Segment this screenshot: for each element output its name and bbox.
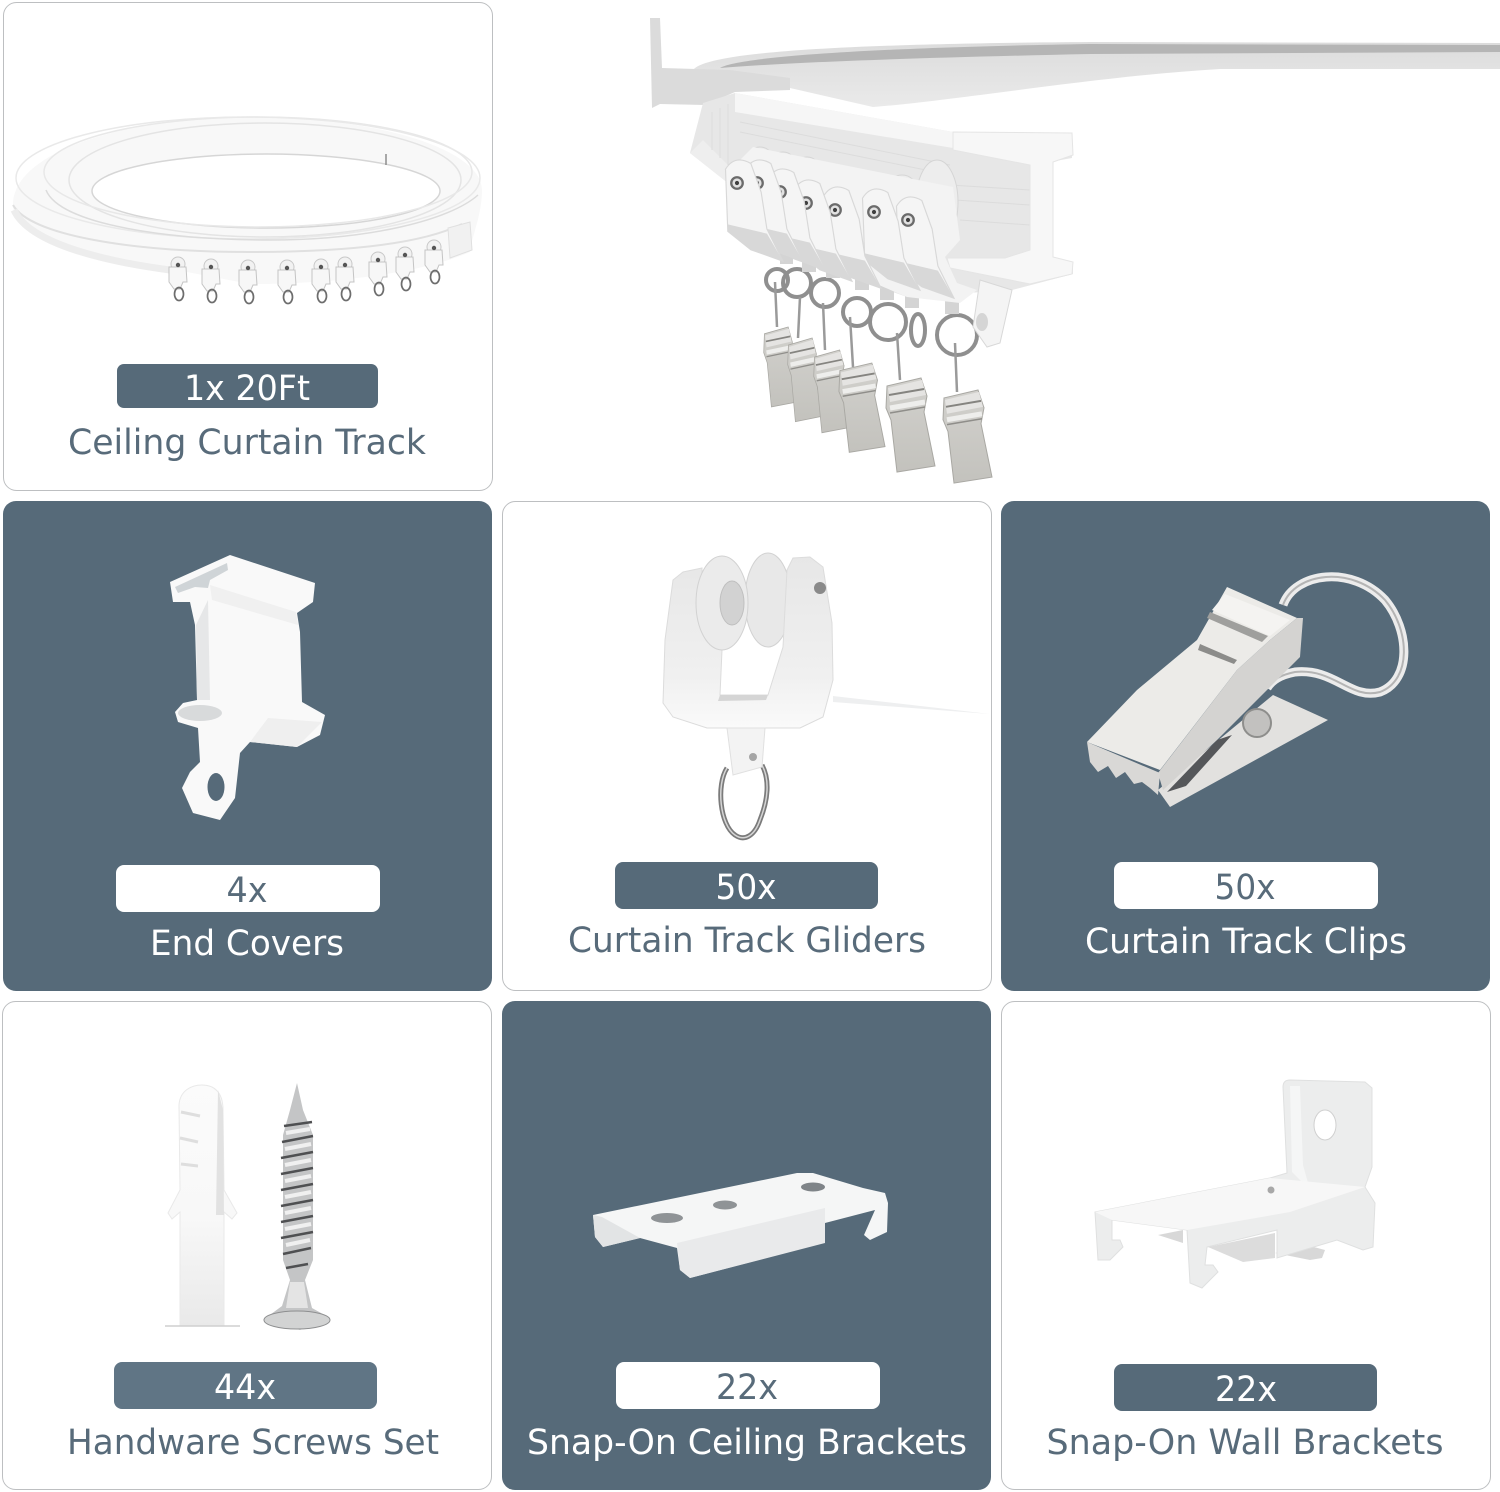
icon: glider xyxy=(663,553,990,838)
panel: ceiling curtain track xyxy=(4,2,492,490)
quantity pill: 50x xyxy=(1114,862,1378,909)
quantity pill: 22x xyxy=(616,1362,880,1409)
quantity pill: 4x: 4x xyxy=(226,871,268,911)
hanging rings xyxy=(766,269,977,355)
panel: snap-on ceiling brackets xyxy=(502,1001,991,1490)
hanging clips xyxy=(764,327,798,407)
quantity pill: 50x: 50x xyxy=(716,868,776,908)
icon: ceiling bracket xyxy=(593,1173,888,1278)
quantity pill: 44x xyxy=(114,1362,377,1409)
label: Curtain Track Gliders: Curtain Track Gliders xyxy=(568,921,926,961)
quantity pill: 22x: 22x xyxy=(1215,1370,1277,1410)
panel: curtain track gliders xyxy=(502,502,992,990)
end glider tab xyxy=(973,280,1012,347)
label: Curtain Track Clips: Curtain Track Clips xyxy=(1085,922,1407,962)
track body xyxy=(690,93,1073,297)
quantity pill: 50x: 50x xyxy=(1214,868,1276,908)
label: End Covers: End Covers xyxy=(150,924,344,964)
label: Handware Screws Set: Handware Screws Set xyxy=(67,1423,439,1463)
quantity pill: 44x: 44x xyxy=(214,1368,276,1408)
label: Ceiling Curtain Track: Ceiling Curtain Track xyxy=(68,423,427,463)
clip wires xyxy=(775,282,957,392)
glider stems xyxy=(780,250,959,314)
icon: end cover xyxy=(170,555,325,820)
icon: screw xyxy=(263,1083,330,1330)
blurred mounting post xyxy=(650,18,790,108)
quantity pill: 1x 20Ft xyxy=(117,364,378,409)
side face xyxy=(1158,618,1303,790)
label: Snap-On Ceiling Brackets: Snap-On Ceiling Brackets xyxy=(527,1423,967,1463)
wire ring xyxy=(1267,577,1404,693)
top plate xyxy=(1087,587,1297,770)
rollers xyxy=(745,553,791,647)
quantity pill: 22x xyxy=(1114,1364,1377,1411)
glider plates xyxy=(896,197,954,298)
icon: clip xyxy=(1087,577,1404,807)
quantity pill: 22x: 22x xyxy=(716,1368,778,1408)
panel: end covers xyxy=(3,501,492,991)
icon: wall bracket xyxy=(1095,1080,1375,1288)
curved rail xyxy=(693,42,1500,107)
bolt xyxy=(1243,709,1271,737)
end cap xyxy=(947,132,1073,284)
quantity pill: 1x 20Ft: 1x 20Ft xyxy=(184,369,310,409)
panel: handware screws set xyxy=(2,1002,492,1490)
glider mass xyxy=(733,147,977,303)
stem xyxy=(727,728,765,775)
panel: curtain track clips xyxy=(1001,501,1490,991)
panel: snap-on wall brackets xyxy=(1002,1002,1490,1490)
label: Snap-On Wall Brackets: Snap-On Wall Brackets xyxy=(1046,1423,1444,1463)
glider rollers xyxy=(747,147,958,244)
icon: coiled track xyxy=(13,117,482,304)
lower jaw xyxy=(1158,695,1328,807)
ring xyxy=(721,765,767,838)
quantity pill: 50x xyxy=(615,862,878,909)
quantity pill: 4x xyxy=(116,865,380,912)
hero image: installed curved track with gliders and clips xyxy=(650,18,1500,483)
teeth xyxy=(1087,742,1160,795)
icon: wall anchor xyxy=(165,1085,240,1326)
